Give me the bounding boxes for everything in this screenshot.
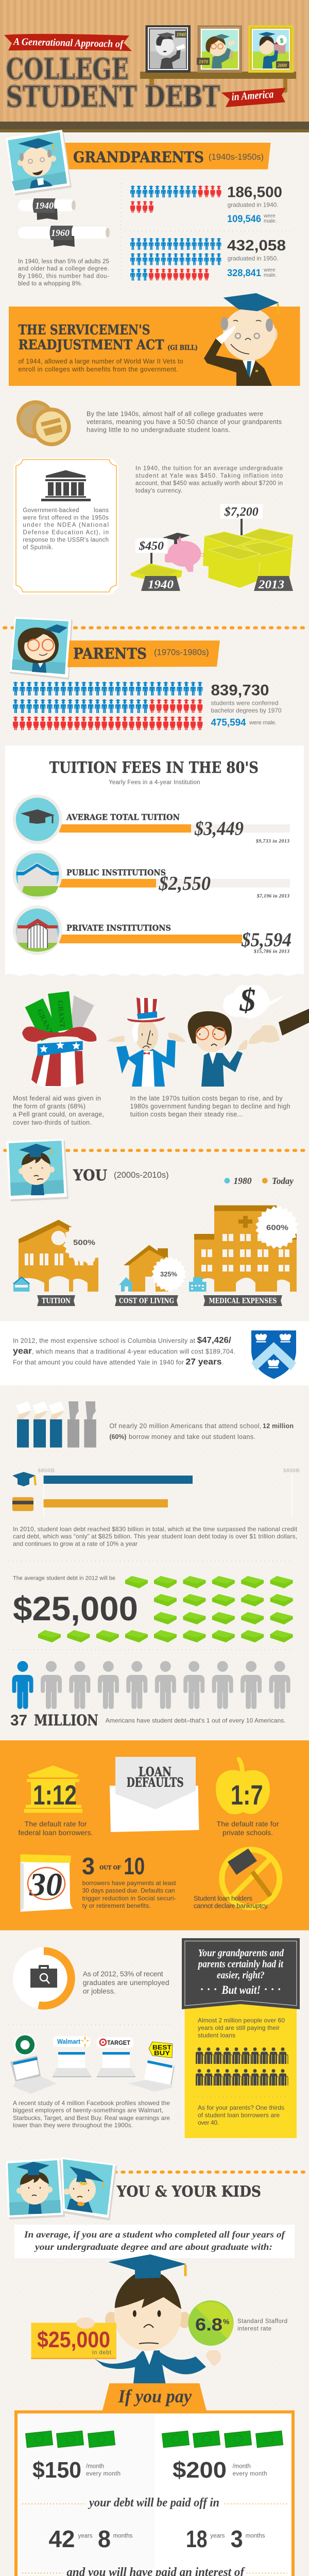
icon: no gavel: Student loan holders bbox=[194, 1894, 252, 1902]
amount: $150: every month bbox=[86, 2471, 121, 2477]
heading: Yearly Fees in a 4-year Institution bbox=[109, 779, 200, 786]
callout: on average: your undergraduate degree and are about graduate with: bbox=[34, 2242, 272, 2252]
text: response to the USSR's launch bbox=[23, 537, 109, 543]
text: federal aid: the form of grants (68%) bbox=[13, 1103, 85, 1110]
illustration: hat full of grants bbox=[22, 991, 96, 1088]
callout text: parents certainly had it bbox=[197, 1959, 284, 1970]
stat: 42 years 8 months: 42 bbox=[48, 2526, 75, 2552]
text: degree share bbox=[18, 259, 109, 287]
text: parents over 40 bbox=[198, 2104, 284, 2126]
heading: YOU bbox=[73, 1166, 107, 1184]
stat: 839,730: bachelor degrees by 1970 bbox=[211, 707, 282, 714]
text: Government-backed bbox=[23, 507, 79, 514]
illustration: employers on laptops bbox=[10, 2033, 174, 2094]
panel: but wait bbox=[182, 1938, 300, 2138]
stat: 37 million: 37 bbox=[10, 1712, 27, 1729]
panel: if you pay: If you pay bbox=[118, 2386, 192, 2406]
text: tuition rise bbox=[130, 1095, 290, 1118]
text: degree share: By 1960, this number had dou- bbox=[18, 273, 109, 279]
text: Yale tuition: In 1940, the tuition for an average undergraduate bbox=[135, 466, 283, 472]
text: $830 billion: In 2010, student loan debt reached $830 billion in total, which at the time surpassed the national credit bbox=[13, 1526, 298, 1533]
text: unemployed: or jobless. bbox=[83, 1987, 116, 1995]
laptop + Starbucks bbox=[10, 2033, 57, 2094]
text: unemployed: graduates are unemployed bbox=[83, 1978, 169, 1987]
heading: READJUSTMENT ACT bbox=[19, 337, 164, 353]
text: over 60: Almost 2 million people over 60 bbox=[198, 2017, 285, 2024]
label: medical expenses: MEDICAL EXPENSES bbox=[209, 1297, 277, 1306]
title: STUDENT DEBT bbox=[6, 80, 220, 114]
text: of Sputnik. bbox=[23, 545, 53, 551]
frame: 1940 grandfather: 1940 bbox=[177, 32, 186, 37]
laptop + Best Buy bbox=[129, 2042, 174, 2092]
callout text: easier, right? bbox=[217, 1970, 265, 1981]
text: tuition rise: 1980s government funding began to decline and high bbox=[130, 1103, 290, 1110]
text: Yale tuition: today's currency. bbox=[135, 488, 182, 494]
row: public institutions: $7,196 in 2013 bbox=[256, 893, 289, 899]
panel: tuition fees in the 80s bbox=[5, 745, 304, 976]
text: Facebook study: A recent study of 4 million Facebook profiles showed the bbox=[13, 2099, 170, 2107]
photo: you bbox=[6, 1139, 68, 1201]
heading: paid off in: your debt will be paid off in bbox=[88, 2496, 219, 2510]
amount: $200: $200 bbox=[173, 2458, 227, 2483]
scroll: 1940: 1940 bbox=[35, 200, 54, 211]
chart: student vs credit card debt: $850B bbox=[283, 1467, 300, 1473]
amount: $150 bbox=[32, 2458, 121, 2483]
stat: 18 years 3 months: years bbox=[210, 2533, 225, 2539]
text: Facebook study bbox=[13, 2099, 170, 2129]
stat: 186,500: male. bbox=[264, 218, 277, 224]
stat: 37 million bbox=[10, 1711, 286, 1729]
stat: 1:12 federal: The default rate for bbox=[25, 1820, 87, 1828]
panel: GI bill bbox=[9, 293, 300, 386]
text: Yale tuition: account, that $450 was actually worth about $7200 in bbox=[135, 480, 283, 486]
icon: coins with broken card bbox=[16, 400, 71, 446]
text: For that amount you could have attended Yale in 1940 for bbox=[13, 1359, 184, 1366]
stat: 839,730 bbox=[211, 682, 282, 728]
text: parents over 40: of student loan borrowers are bbox=[198, 2112, 280, 2119]
text: federal aid bbox=[13, 1095, 104, 1126]
money stacks 2013 bbox=[203, 529, 293, 588]
text: $830 billion bbox=[13, 1526, 298, 1548]
stat: 3 out of 10: OUT OF bbox=[99, 1865, 121, 1871]
callout text: But wait! bbox=[221, 1984, 261, 1996]
pictogram: 1970 graduates bbox=[13, 682, 202, 730]
title bbox=[6, 53, 220, 114]
row: average tuition: AVERAGE TOTAL TUITION bbox=[66, 812, 180, 822]
text: 60 percent borrow: (60%) bbox=[109, 1433, 126, 1440]
amount: $150: $150 bbox=[32, 2458, 81, 2483]
stat: 432,058: male. bbox=[264, 272, 277, 278]
heading ribbon: GRANDPARENTS bbox=[73, 148, 204, 166]
icon: cap bbox=[12, 1472, 36, 1486]
small 1980 house bbox=[119, 1277, 134, 1292]
callout text: Your grandparents and bbox=[198, 1947, 284, 1959]
heading ribbon bbox=[63, 143, 271, 170]
chart: house 325%: 325% bbox=[160, 1271, 177, 1278]
banner: in america bbox=[221, 88, 286, 107]
stat: 1:7 private bbox=[216, 1757, 279, 1837]
amount: $200: /month bbox=[233, 2464, 251, 2470]
frame: 2000 you bbox=[248, 25, 294, 73]
icon: no gavel: cannot declare bankruptcy. bbox=[194, 1902, 269, 1910]
row: private institutions bbox=[13, 905, 291, 955]
envelope: loan defaults bbox=[110, 1757, 199, 1832]
text: veterans: By the late 1940s, almost half of all college graduates were bbox=[87, 411, 263, 418]
stat: 839,730: 839,730 bbox=[211, 682, 269, 699]
amount: $150: /month bbox=[86, 2464, 104, 2470]
row: private institutions: $15,786 in 2013 bbox=[253, 949, 289, 954]
stat: 186,500: 186,500 bbox=[227, 184, 282, 200]
heading ribbon bbox=[67, 640, 220, 667]
row: private institutions: $5,594 bbox=[241, 929, 291, 951]
photo: baby bbox=[61, 2157, 117, 2221]
stat: 1:7 private: private schools. bbox=[222, 1828, 273, 1837]
text: unemployed bbox=[83, 1970, 169, 1995]
laptop + Best Buy: BUY bbox=[154, 2050, 170, 2057]
stat: 1:7 private: 1:7 bbox=[231, 1780, 263, 1810]
text: veterans: having little to no undergraduate student loans. bbox=[87, 427, 230, 434]
text: parents over 40: As for your parents? One thirds bbox=[198, 2104, 284, 2111]
illustration: worried parent and pointing hand: $ bbox=[239, 983, 255, 1018]
illustration: worried parent and pointing hand bbox=[188, 983, 309, 1087]
2013 tag bbox=[254, 576, 293, 591]
saluting grandpa bbox=[204, 293, 279, 386]
debt card: in debt bbox=[92, 2349, 111, 2355]
interest rate disc: interest rate bbox=[237, 2326, 271, 2332]
stat: 18 years 3 months bbox=[186, 2526, 265, 2552]
stat: 42 years 8 months bbox=[48, 2526, 133, 2552]
banner: in america: in America bbox=[231, 88, 274, 103]
$450 tag: $450 bbox=[139, 539, 164, 552]
header: wood wall bbox=[0, 0, 309, 132]
stat: 186,500 bbox=[227, 184, 282, 225]
amount: $200 bbox=[173, 2458, 267, 2483]
text: 60 percent borrow: Of nearly 20 million Americans that attend school, bbox=[109, 1422, 261, 1430]
label: cost of living: COST OF LIVING bbox=[119, 1297, 174, 1306]
legend: Today bbox=[272, 1176, 294, 1186]
panel: Columbia University bbox=[0, 1321, 309, 1385]
stat: 839,730: students were conferred bbox=[211, 700, 278, 707]
frame: 1970 parent: 1970 bbox=[199, 59, 208, 64]
bills: 3 bbox=[26, 2431, 115, 2448]
stat: 432,058: 328,841 bbox=[227, 268, 261, 279]
text: tuition rise: tuition costs began their steady rise... bbox=[130, 1111, 243, 1118]
heading: (GI BILL) bbox=[167, 344, 198, 352]
stat: average student debt: The average student debt in 2012 will be bbox=[13, 1575, 115, 1581]
text: under the NDEA (National bbox=[23, 522, 109, 529]
text: over 60: student loans bbox=[198, 2032, 235, 2039]
chart: tuition building 500% bbox=[13, 1220, 106, 1292]
interest rate disc: % bbox=[223, 2317, 230, 2326]
text: of 1944, allowed a large number of World War II Vets to bbox=[19, 358, 183, 365]
text: Yale tuition: student at Yale was $450. Taking inflation into bbox=[135, 473, 283, 479]
2013 tag: 2013 bbox=[258, 578, 284, 591]
text: Facebook study: Starbucks, Target, and Best Buy. Real wage earnings are bbox=[13, 2114, 170, 2122]
$7,200 tag: $7,200 bbox=[224, 505, 259, 519]
chart: house 325% bbox=[119, 1245, 186, 1292]
stat: 186,500: graduated in 1940. bbox=[228, 201, 279, 208]
chart: 1940 vs 2013 tuition bbox=[130, 504, 293, 591]
icon: bank bbox=[41, 470, 91, 501]
callout text bbox=[197, 1947, 284, 1996]
panel: grandparents bbox=[6, 130, 291, 287]
stat: 186,500: were bbox=[263, 213, 276, 219]
chart: student vs credit card debt bbox=[12, 1467, 300, 1516]
pictogram: money stacks bbox=[38, 1576, 293, 1642]
chart: hospital 600% bbox=[189, 1206, 298, 1292]
pictogram: 1 in 10 Americans bbox=[12, 1661, 290, 1709]
small 1980 school bbox=[13, 1277, 29, 1292]
stat: 18 years 3 months: 18 bbox=[186, 2526, 208, 2552]
row: average tuition: $9,733 in 2013 bbox=[255, 839, 289, 844]
laptop + Best Buy: BEST bbox=[152, 2045, 171, 2051]
stat: 432,058: 432,058 bbox=[227, 238, 286, 254]
legend: 1980 bbox=[234, 1176, 251, 1186]
$450 tag bbox=[135, 538, 167, 564]
stat: average student debt: $25,000 bbox=[13, 1589, 138, 1628]
text: unemployed: As of 2012, 53% of recent bbox=[83, 1970, 163, 1978]
stat: 3 out of 10: ty or retirement benefits. bbox=[82, 1902, 151, 1909]
panel: loan defaults bbox=[0, 1740, 309, 1930]
row: public institutions: $2,550 bbox=[159, 873, 211, 894]
chart: student vs credit card debt: $800B bbox=[38, 1467, 55, 1473]
interest rate disc: Standard Stafford bbox=[237, 2318, 287, 2325]
frame: 1970 parent bbox=[197, 25, 242, 73]
text: parents over 40: over 40. bbox=[198, 2119, 219, 2126]
frame: 1940 grandfather bbox=[145, 25, 191, 73]
stat: 3 out of 10: trigger reduction in Social securi- bbox=[82, 1894, 176, 1902]
text: Defense Education Act), in bbox=[23, 530, 109, 536]
title: STUDENT DEBT bbox=[6, 80, 220, 114]
label: cost of living bbox=[115, 1295, 178, 1306]
icon: calendar 30 bbox=[20, 1854, 73, 1912]
stat: 3 out of 10: 10 bbox=[124, 1853, 145, 1879]
chart: donut 53% unemployed bbox=[13, 1947, 75, 2009]
stat: 432,058: were bbox=[263, 267, 276, 273]
heading bbox=[49, 759, 259, 786]
debt card bbox=[31, 2317, 116, 2359]
text: . bbox=[222, 1359, 224, 1366]
laptop + Target: TARGET bbox=[107, 2039, 131, 2046]
heading: TUITION FEES IN THE 80'S bbox=[49, 759, 259, 777]
text: Facebook study: lower than they were throughout the 1900s. bbox=[13, 2122, 133, 2129]
pictogram: 1950 graduates bbox=[130, 238, 221, 281]
stat: 42 years 8 months: years bbox=[78, 2533, 93, 2539]
small 1980 hospital bbox=[189, 1277, 207, 1292]
heading ribbon: (1940s-1950s) bbox=[209, 152, 264, 162]
icon: no gavel bbox=[194, 1849, 280, 1910]
illustration: hat full of grants: GRANT bbox=[56, 1000, 66, 1028]
text: degree share: In 1940, less than 5% of adults 25 bbox=[18, 259, 109, 265]
stat: 1:12 federal: 1:12 bbox=[33, 1780, 77, 1810]
icon: calendar 30: 30 bbox=[29, 1866, 62, 1903]
stat: 1:7 private: The default rate for bbox=[216, 1820, 279, 1828]
text: federal aid: Most federal aid was given in bbox=[13, 1095, 101, 1102]
stat: 432,058 bbox=[227, 238, 286, 279]
icon: raised hands with envelopes bbox=[16, 1401, 96, 1448]
laptop + Walmart bbox=[53, 2036, 91, 2077]
text: degree share: bled to a whopping 8%. bbox=[18, 281, 82, 287]
text: federal aid: a Pell grant could, on average, bbox=[13, 1111, 104, 1118]
frame: 2000 you: 2000 bbox=[277, 63, 287, 68]
label: medical expenses bbox=[203, 1295, 282, 1306]
text: Yale tuition bbox=[135, 466, 283, 494]
interest rate disc: 6.8 bbox=[195, 2315, 222, 2335]
illustration: hat full of grants: GRANT bbox=[35, 1008, 54, 1037]
1940 tag bbox=[141, 576, 180, 591]
bills: 4 bbox=[162, 2431, 283, 2448]
stat: 1:12 federal bbox=[19, 1766, 93, 1837]
row: public institutions: PUBLIC INSTITUTIONS bbox=[66, 868, 166, 877]
title: COLLEGE bbox=[6, 53, 129, 87]
row: public institutions bbox=[13, 850, 290, 900]
banner: a generational approach of: A Generational Approach of bbox=[12, 36, 124, 50]
panel: if you pay bbox=[14, 2383, 295, 2576]
text: veterans: veterans, meaning you have a 50:50 chance of your grandparents bbox=[87, 418, 282, 426]
stat: 3 out of 10: 30 days passed due. Defaults can bbox=[82, 1887, 175, 1894]
text: were first offered in the 1950s bbox=[22, 515, 109, 521]
heading: THE SERVICEMEN'S bbox=[19, 323, 150, 338]
callout: on average bbox=[14, 2225, 295, 2258]
text: degree share: and older had a college degree. bbox=[18, 266, 109, 272]
row: average tuition bbox=[13, 794, 290, 844]
label: tuition: TUITION bbox=[42, 1297, 71, 1306]
1940 tag: 1940 bbox=[148, 578, 174, 591]
stat: 37 million: MILLION bbox=[34, 1711, 98, 1729]
stat: 3 out of 10: borrowers have payments at least bbox=[82, 1879, 176, 1887]
stat: 432,058: graduated in 1950. bbox=[228, 255, 279, 262]
heading: YOU & YOUR KIDS bbox=[116, 2183, 261, 2200]
row: average tuition: $3,449 bbox=[194, 818, 244, 840]
envelope: loan defaults: DEFAULTS bbox=[127, 1775, 184, 1790]
stat: 18 years 3 months: months bbox=[246, 2533, 265, 2539]
pictogram: elderly borrowers bbox=[196, 2047, 288, 2086]
stat: 37 million: Americans have student debt–that's 1 out of every 10 Americans. bbox=[106, 1717, 286, 1724]
text: Facebook study: biggest employers of twenty-somethings are Walmart, bbox=[13, 2107, 163, 2114]
text: 27 years bbox=[185, 1357, 221, 1366]
stat: 42 years 8 months: months bbox=[113, 2533, 133, 2539]
stat: 42 years 8 months: 8 bbox=[98, 2526, 111, 2552]
frame: 2000 you: $ bbox=[280, 37, 284, 44]
text: over 60: years old are still paying their bbox=[198, 2024, 280, 2031]
amount: $200: every month bbox=[233, 2471, 267, 2477]
laptop + Walmart: Walmart bbox=[57, 2038, 81, 2045]
text: veterans bbox=[87, 411, 282, 434]
stat: 18 years 3 months: 3 bbox=[231, 2526, 243, 2552]
piggy bank bbox=[163, 533, 204, 572]
stat: 186,500: 109,546 bbox=[227, 214, 261, 225]
text: $830 billion: card debt, which was “only” at $825 billion. This year student loan debt today is over $1 trillion dollars, bbox=[13, 1533, 297, 1540]
panel: you and your kids bbox=[6, 2157, 295, 2383]
scroll: 1940 bbox=[18, 198, 76, 220]
stat: 839,730: 475,594 bbox=[211, 718, 246, 728]
text bbox=[19, 358, 183, 373]
envelope: loan defaults: LOAN bbox=[139, 1765, 171, 1780]
heading bbox=[19, 323, 198, 353]
icon: credit card bbox=[12, 1497, 33, 1511]
illustration: uncle sam shrugging bbox=[107, 997, 186, 1087]
text: , which means that a traditional 4-year education will cost $189,704. bbox=[32, 1348, 235, 1355]
character: graduate with debt bbox=[31, 2255, 287, 2383]
icon: shield bbox=[251, 1330, 296, 1379]
text: enroll in colleges with benefits from the government. bbox=[19, 366, 178, 373]
text: tuition rise: In the late 1970s tuition costs began to rise, and by bbox=[130, 1095, 283, 1102]
text: $830 billion: and continues to grow at a rate of 10% a year bbox=[13, 1540, 138, 1548]
text: In 2012, the most expensive school is Columbia University at bbox=[13, 1337, 196, 1345]
$7,200 tag bbox=[220, 504, 263, 535]
heading ribbon: (1970s-1980s) bbox=[154, 648, 209, 657]
photo: parent bbox=[10, 617, 73, 680]
stat: 3 out of 10: 3 bbox=[82, 1853, 95, 1879]
pictogram: 1940 graduates bbox=[130, 185, 221, 213]
card: NDEA loans bbox=[13, 458, 118, 595]
legend bbox=[225, 1176, 294, 1186]
heading bbox=[73, 1166, 169, 1184]
stat: 839,730: were male. bbox=[249, 720, 277, 726]
chart: hospital 600%: 600% bbox=[266, 1224, 288, 1232]
stat: 1:12 federal: federal loan borrowers. bbox=[19, 1828, 93, 1837]
heading ribbon: PARENTS bbox=[73, 645, 147, 662]
photo: grandpa bbox=[6, 130, 72, 195]
shelf bbox=[140, 72, 296, 93]
text bbox=[13, 1335, 235, 1366]
text: federal aid: cover two-thirds of tuition. bbox=[13, 1119, 92, 1126]
row: private institutions: PRIVATE INSTITUTIONS bbox=[66, 923, 171, 933]
scroll: 1960: 1960 bbox=[51, 228, 70, 238]
text: 60 percent borrow: 12 million bbox=[263, 1422, 294, 1430]
laptop + Target bbox=[97, 2037, 135, 2077]
text: loans bbox=[94, 507, 109, 514]
stat: average student debt bbox=[13, 1575, 293, 1642]
heading: (2000s-2010s) bbox=[114, 1170, 169, 1180]
text: year bbox=[13, 1346, 32, 1356]
photo: you bbox=[6, 2158, 65, 2219]
scroll: 1960 bbox=[18, 226, 110, 247]
stat: 3 out of 10 bbox=[82, 1853, 176, 1909]
text bbox=[22, 507, 109, 551]
label: tuition bbox=[37, 1295, 75, 1306]
money stack 1940 bbox=[130, 564, 182, 584]
callout: on average: In average, if you are a student who completed all four years of bbox=[24, 2229, 286, 2240]
text: 60 percent borrow: borrow money and take out student loans. bbox=[129, 1433, 255, 1440]
chart: tuition building 500%: 500% bbox=[73, 1239, 95, 1247]
debt card: $25,000 bbox=[37, 2327, 110, 2352]
text: $47,426/ bbox=[197, 1335, 231, 1345]
panel: parents bbox=[10, 617, 282, 730]
text: over 60 bbox=[198, 2017, 285, 2039]
interest rate disc bbox=[188, 2300, 287, 2366]
title: COLLEGE bbox=[6, 53, 129, 87]
text: 60 percent borrow bbox=[109, 1422, 294, 1440]
panel: you bbox=[6, 1139, 294, 1201]
